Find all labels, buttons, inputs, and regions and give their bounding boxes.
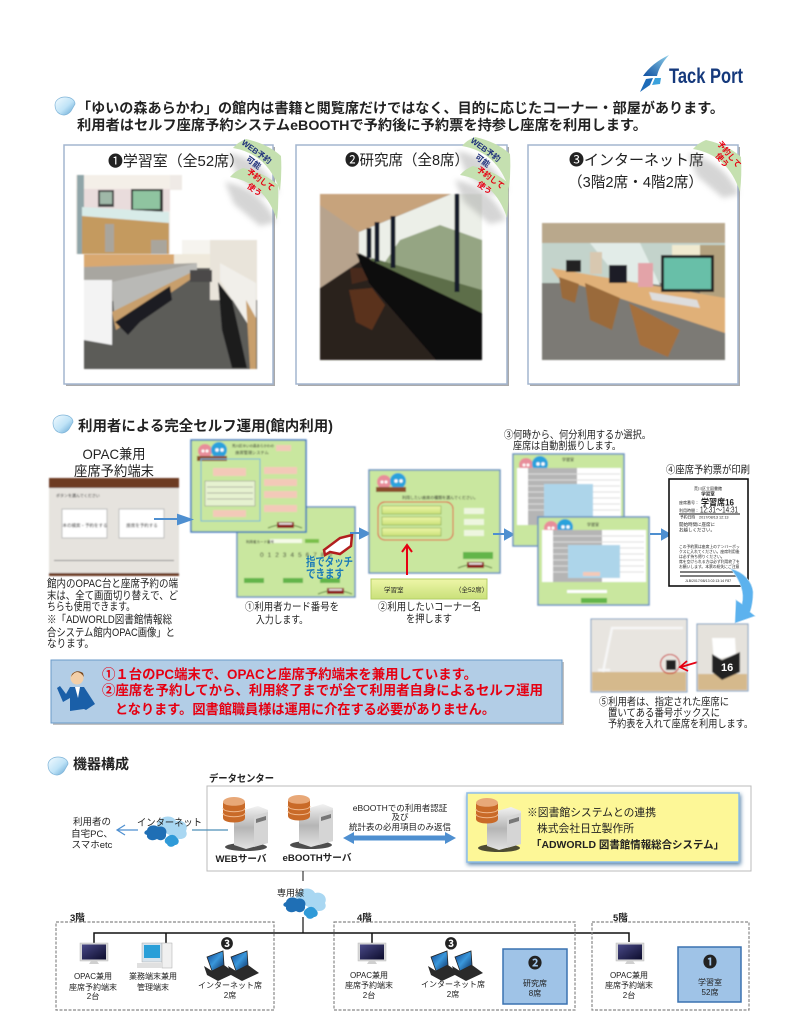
text: internet seats: [198, 981, 262, 1000]
text: OPAC terminals: 座席予約端末: [69, 982, 117, 992]
heading: self operation: 利用者による完全セルフ運用(館内利用): [78, 417, 333, 435]
ticket: printed reservation: は必ず持ち帰りください。: [679, 554, 725, 559]
panel: floor 5: [592, 912, 749, 1010]
icon: laptops: [428, 951, 483, 981]
caption: step 3: 座席は自動割振りします。: [513, 439, 621, 452]
diagram: leased line: 専用線: [277, 887, 304, 898]
text: OPAC note: 末は、全て画面切り替えで、ど: [47, 588, 178, 602]
tag: web reservation: WEB予約: [469, 135, 503, 164]
text: OPAC terminals: OPAC兼用: [610, 970, 648, 980]
caption: step 2: ②利用したいコーナー名: [378, 600, 481, 613]
tag: web reservation: WEB予約: [240, 137, 274, 166]
tag: reserve to use: [455, 164, 508, 224]
text: data exchange: eBOOTHでの利用者認証: [353, 803, 448, 813]
tag: reserve to use: 予約して: [715, 139, 743, 169]
caption: step 3: ③何時から、何分利用するか選択。: [504, 428, 651, 441]
caption: step 2: を押します: [406, 612, 452, 625]
tag: reserve to use: 使う: [245, 181, 264, 198]
tag: reserve to use: 予約して: [475, 164, 507, 191]
tag: reserve to use: 予約して: [245, 166, 277, 193]
panel: library system: ※図書館システムとの連携: [527, 805, 656, 819]
label: OPAC terminal: OPAC兼用: [82, 446, 146, 462]
box: study room: 学習室: [698, 977, 722, 987]
text: user devices: [71, 816, 113, 851]
photo: internet terminals: [542, 223, 725, 360]
caption: step 1: ①利用者カード番号を: [245, 601, 339, 613]
text: OPAC note: 合システム館内OPAC画像」と: [47, 625, 175, 639]
icon: pointing hand: [306, 535, 353, 581]
text: OPAC terminals: [345, 970, 393, 1000]
photo: number box: 16: [721, 662, 733, 674]
heading: equipment: 機器構成: [73, 756, 129, 772]
number: internet seats: ❸: [445, 937, 458, 951]
callout: key points: ②座席を予約してから、利用終了までが全て利用者自身によるセルフ運用: [102, 682, 543, 698]
button: study room: [371, 579, 488, 599]
panel title: internet seats: （3階2席・4階2席）: [568, 174, 703, 191]
caption: step 2: [378, 600, 481, 625]
box: study room: ❶: [703, 954, 717, 970]
ticket: printed reservation: 開始時間に座席に: [679, 521, 715, 528]
ticket: printed reservation: クスに入れてください。座席利用後: [679, 549, 740, 554]
callout: key points: となります。図書館職員様は運用に介在する必要がありません。: [115, 701, 495, 717]
caption: step 5: [599, 695, 753, 730]
text: OPAC note: [47, 576, 178, 650]
icon: admin PC: [137, 943, 172, 968]
photo: number box: [697, 624, 748, 691]
ticket: printed reservation: 座席番号：: [679, 499, 699, 505]
screen: reservation menu: [191, 440, 306, 532]
screen: reservation menu: 座席管理システム: [235, 449, 269, 456]
ticket: printed reservation: 席を空けられる方は必ず利用終了を: [679, 559, 740, 564]
ticket: printed reservation: お越しください。: [679, 526, 715, 534]
panel: data center: [207, 786, 751, 871]
arrow: red pointer to box: [680, 659, 708, 671]
screen: OPAC terminal: 本の検索・予約をする: [62, 522, 108, 529]
icon: staff woman: [57, 671, 95, 711]
heading: equipment: [48, 756, 129, 775]
text: internet seats: 2席: [224, 991, 236, 1000]
panel: study room: [64, 137, 281, 386]
arrow: curved ticket to seat: [731, 569, 755, 623]
number: internet seats: ❸: [221, 937, 234, 951]
caption: step 5: ⑤利用者は、指定された座席に: [599, 695, 729, 708]
text: OPAC terminals: 座席予約端末: [345, 980, 393, 990]
icon: OPAC monitor: [358, 943, 386, 964]
callout: key points: ①１台のPC端末で、OPACと座席予約端末を兼用しています。: [102, 666, 477, 682]
ticket: printed reservation: この予約票は座席上のナンバーボッ: [679, 544, 740, 549]
photo: study room carrels: [84, 240, 257, 369]
diagram: internet link: [117, 816, 228, 847]
panel: library system: 「ADWORLD 図書館情報総合システム」: [531, 838, 724, 851]
panel title: research seats: ❷研究席（全8席）: [345, 152, 469, 169]
panel title: internet seats: ❸インターネット席: [569, 152, 704, 169]
tag: reserve to use: [225, 166, 278, 226]
icon: web server: [223, 797, 268, 851]
photo: study desks: [76, 175, 182, 254]
callout: key points: [51, 660, 564, 725]
ticket: printed reservation: お願いします。本票の紛失にご注意: [679, 564, 739, 569]
panel: floor 4: 4階: [357, 912, 372, 924]
label: OPAC terminal: 座席予約端末: [74, 463, 154, 479]
panel title: internet seats: [568, 152, 704, 191]
heading: intro text: [55, 97, 724, 133]
arrow: step 3 to ticket: [650, 530, 670, 539]
text: internet seats: [421, 980, 485, 999]
screen: duration selection: [538, 517, 649, 605]
box: research seats: ❷: [528, 955, 542, 971]
caption: step 5: 予約表を入れて座席を利用します。: [608, 717, 753, 730]
screen: duration selection: 学習室: [587, 521, 599, 527]
text: data exchange: [349, 803, 451, 832]
arrow: up to corner list: [402, 545, 412, 575]
text: admin terminal: 業務端末兼用: [129, 971, 177, 981]
caption: step 5: 置いてある番号ボックスに: [608, 707, 720, 719]
ticket: printed reservation: JLB/2017/08/13 02:13:14 F87: [685, 579, 731, 583]
label: eBOOTH server: eBOOTHサーバ: [282, 853, 352, 864]
screen: OPAC terminal: ボタンを選んでください: [56, 492, 100, 498]
panel: floor 3: 3階: [70, 912, 85, 924]
screen: start time selection: [513, 454, 624, 546]
caption: step 4: ④座席予約票が印刷: [666, 463, 750, 476]
caption: step 3: [504, 428, 651, 452]
text: OPAC note: ※「ADWORLD図書館情報総: [47, 612, 172, 626]
text: internet seats: インターネット席: [198, 981, 262, 990]
text: OPAC terminals: 座席予約端末: [605, 980, 653, 990]
ticket: printed reservation: 学習室: [701, 490, 715, 498]
text: OPAC terminals: 2台: [623, 990, 635, 1000]
text: data exchange: 及び: [391, 812, 409, 822]
arrow: bidirectional link: [343, 832, 456, 844]
panel: research seats: [296, 135, 510, 386]
box: study room: 52席: [702, 988, 718, 997]
tag: web reservation: 可能: [473, 152, 492, 169]
screen: corner selection: 利用したい座席の種類を選んでください。: [402, 494, 478, 500]
panel: internet seats: [528, 139, 743, 386]
ticket: printed reservation: 予約日時 2017/08/13 12:13: [680, 514, 729, 520]
panel: floor 4: [334, 912, 575, 1010]
screen: OPAC terminal: [49, 478, 179, 576]
ticket: printed reservation: [669, 479, 748, 586]
box: research seats: 8席: [529, 989, 541, 998]
ticket: printed reservation: 学習席16: [701, 496, 734, 508]
logo: Tack Port: Tack Port: [669, 65, 743, 88]
text: admin terminal: 管理端末: [137, 982, 169, 992]
text: OPAC terminals: 2台: [87, 991, 99, 1001]
text: internet seats: 2席: [447, 990, 459, 999]
diagram: internet link: インターネット: [137, 817, 202, 829]
text: OPAC note: なります。: [47, 637, 94, 650]
icon: laptops: [204, 951, 259, 981]
tag: web reservation: [457, 135, 510, 195]
icon: pointing hand: 指でタッチ: [306, 554, 353, 569]
box: research seats: [503, 949, 567, 1004]
tag: web reservation: 可能: [244, 154, 263, 171]
photo: desk with number box: [591, 619, 687, 692]
text: user devices: スマホetc: [72, 840, 113, 851]
tag: reserve to use: [688, 139, 743, 198]
text: OPAC note: ちらも使用できます。: [47, 600, 135, 613]
icon: OPAC monitor: [616, 943, 644, 964]
tag: reserve to use: 使う: [713, 151, 731, 169]
tag: reserve to use: 使う: [475, 179, 494, 196]
screen: card number input: 利用者カード番号: [246, 539, 274, 544]
screen: reservation menu: 荒川区ゆいの森あらかわの: [232, 443, 274, 448]
icon: OPAC monitor: [80, 943, 108, 964]
text: user devices: 利用者の: [73, 816, 111, 828]
arrow: step 1 to step 2: [350, 529, 369, 538]
diagram: leased line: [94, 871, 629, 943]
caption: step 1: 入力します。: [256, 613, 308, 626]
text: user devices: 自宅PC、: [71, 828, 113, 840]
logo: Tack Port: [640, 55, 743, 92]
text: data exchange: 統計表の必用項目のみ返信: [349, 822, 451, 832]
box: research seats: 研究席: [523, 978, 547, 988]
icon: eBOOTH server: [288, 795, 333, 849]
label: data center: データセンター: [209, 772, 274, 785]
heading: intro text: 利用者はセルフ座席予約システムeBOOTHで予約後に予約票を持参し座席を利用します。: [77, 117, 647, 133]
photo: window seats: [320, 194, 482, 360]
panel: library system: [467, 793, 739, 862]
arrow: terminal to menu: [154, 515, 191, 524]
ticket: printed reservation: 利用時間：: [679, 507, 699, 513]
icon: pointing hand: できます: [306, 567, 344, 581]
text: OPAC terminals: [605, 970, 653, 1000]
screen: corner selection: [369, 470, 500, 573]
text: OPAC terminals: [69, 971, 117, 1001]
ticket: printed reservation: 荒川区立図書館: [694, 485, 722, 491]
text: OPAC note: 館内のOPAC台と座席予約の端: [47, 576, 178, 590]
panel: library system: 株式会社日立製作所: [537, 821, 634, 835]
button: study room: 学習室: [384, 585, 404, 594]
text: OPAC terminals: OPAC兼用: [74, 971, 112, 981]
caption: step 1: [245, 601, 339, 626]
label: OPAC terminal: [74, 446, 154, 479]
label: web server: WEBサーバ: [216, 854, 267, 865]
box: study room: [678, 947, 741, 1002]
screen: start time selection: 学習室: [562, 456, 574, 462]
tag: web reservation: [228, 137, 281, 197]
panel title: study room: ❶学習室（全52席）: [108, 153, 244, 170]
text: admin terminal: [129, 971, 177, 992]
panel: floor 5: 5階: [613, 912, 628, 924]
screen: OPAC terminal: 座席を予約する: [126, 522, 158, 529]
screen: card number input: [237, 507, 355, 597]
panel: floor 3: [56, 912, 274, 1010]
button: study room: （全52席）: [455, 585, 488, 594]
text: internet seats: インターネット席: [421, 980, 485, 989]
text: OPAC terminals: OPAC兼用: [350, 970, 388, 980]
heading: intro text: 「ゆいの森あらかわ」の館内は書籍と閲覧席だけではなく、目的に応じたコーナー・部屋があります。: [77, 100, 724, 116]
ticket: printed reservation: 12:31〜14:31: [700, 506, 738, 514]
screen: card number input: 0123456789: [260, 552, 332, 559]
text: OPAC terminals: 2台: [363, 990, 375, 1000]
arrow: step 2 to step 3: [493, 530, 513, 539]
